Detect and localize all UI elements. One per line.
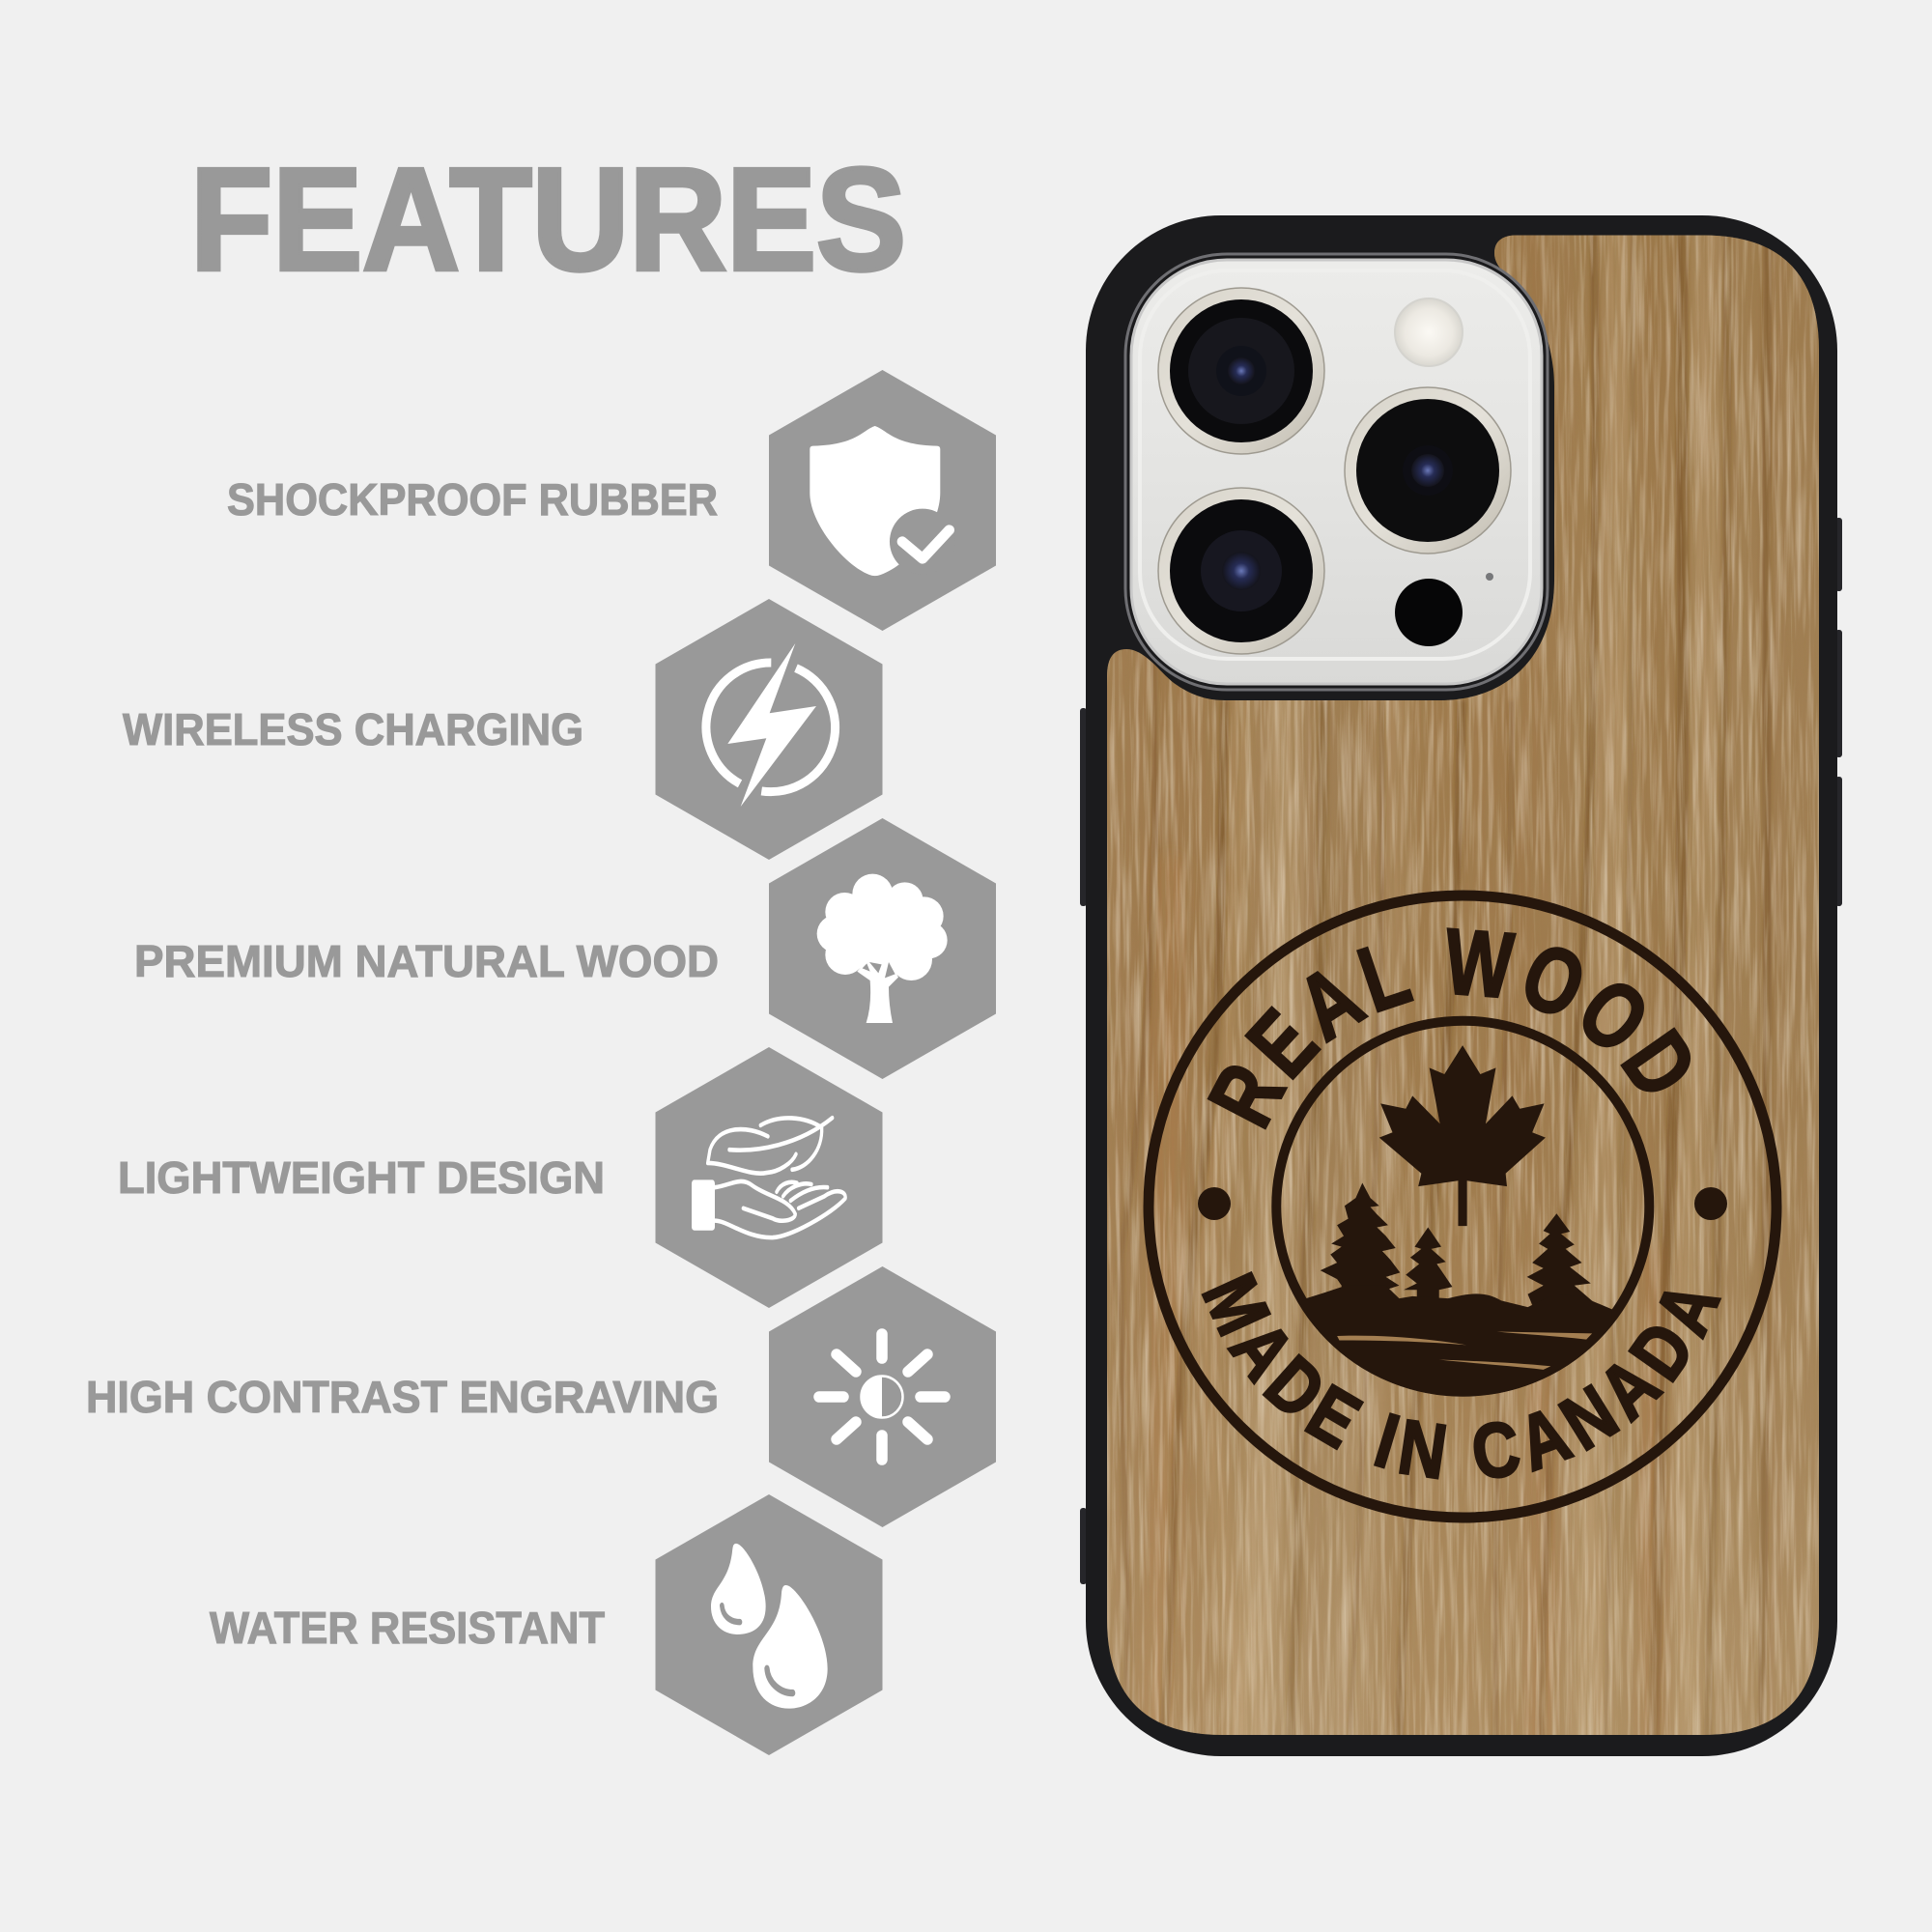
icon: tree — [817, 874, 948, 1023]
hexagon: wood — [769, 818, 996, 1079]
hexagon: shockproof — [769, 370, 996, 631]
label: water resistant: WATER RESISTANT — [210, 1603, 605, 1653]
feature: high contrast engraving — [86, 1266, 996, 1527]
text: real wood: REAL WOOD — [1208, 927, 1690, 1130]
feature: lightweight design — [118, 1047, 883, 1308]
ground highlights — [1337, 1332, 1592, 1370]
icon: shield with check — [810, 426, 955, 576]
feature: water resistant — [210, 1494, 883, 1755]
label: lightweight design: LIGHTWEIGHT DESIGN — [118, 1152, 605, 1203]
side buttons — [1080, 518, 1842, 1584]
dots — [1198, 1187, 1727, 1220]
hexagon: contrast — [769, 1266, 996, 1527]
text: made in canada: MADE IN CANADA — [1202, 1271, 1721, 1480]
label: high contrast engraving: HIGH CONTRAST ENGRAVING — [86, 1372, 719, 1422]
feature: premium natural wood — [134, 818, 996, 1079]
maple leaf — [1379, 1045, 1546, 1226]
rubber bumper — [1086, 215, 1837, 1756]
hexagon: wireless — [655, 599, 883, 860]
hexagon: lightweight — [655, 1047, 883, 1308]
icon: water drops — [711, 1544, 828, 1709]
label: shockproof rubber: SHOCKPROOF RUBBER — [227, 474, 718, 525]
wood back panel — [1101, 232, 1826, 1741]
microphone — [1486, 573, 1493, 581]
art: maple leaf, trees and hills — [1306, 1045, 1612, 1405]
label: premium natural wood: PREMIUM NATURAL WOOD — [134, 936, 719, 986]
lens: bottom left — [1158, 488, 1324, 654]
engraved logo — [1144, 891, 1781, 1522]
lidar — [1395, 579, 1463, 646]
camera plateau — [1125, 254, 1548, 690]
icon: lightning bolt in ring — [706, 643, 836, 807]
flash — [1395, 298, 1463, 366]
icon: contrast sun — [819, 1334, 945, 1460]
inner ring — [1276, 1021, 1649, 1392]
icon: hand holding leaf — [692, 1118, 845, 1237]
outer ring — [1149, 895, 1776, 1518]
feature: shockproof rubber — [227, 370, 996, 631]
lens: top left — [1158, 288, 1324, 454]
lens: right — [1345, 387, 1511, 554]
hexagon: water — [655, 1494, 883, 1755]
feature: wireless charging — [123, 599, 883, 860]
plateau edge — [1125, 254, 1548, 690]
trees and ground — [1306, 1183, 1612, 1405]
phone case — [1080, 215, 1842, 1756]
label: wireless charging: WIRELESS CHARGING — [123, 704, 583, 754]
title: FEATURES — [190, 137, 906, 300]
plateau surface — [1130, 259, 1543, 685]
